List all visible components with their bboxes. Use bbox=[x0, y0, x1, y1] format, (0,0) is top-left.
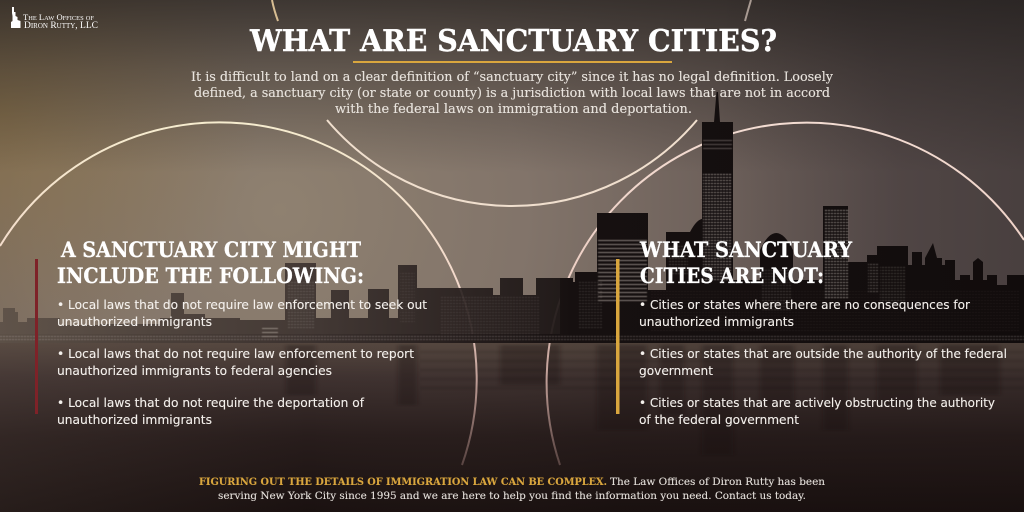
title: WHAT ARE SANCTUARY CITIES? bbox=[249, 24, 777, 59]
footer call to action: The Law Offices of Diron Rutty has been bbox=[610, 476, 825, 488]
bullet list: might include bbox=[57, 297, 427, 427]
decorative arc: right circle bbox=[547, 123, 1024, 465]
decorative arc: left circle bbox=[0, 122, 477, 465]
bullet list: might include: unauthorized immigrants bbox=[57, 412, 212, 427]
accent bar: gold bbox=[616, 259, 620, 414]
bullet list: are not: • Cities or states that are actively obstructing the authority bbox=[639, 395, 996, 410]
skyline lit windows bbox=[0, 140, 1024, 341]
bullet list: might include: • Local laws that do not require law enforcement to report bbox=[57, 346, 414, 361]
skyline silhouette bbox=[0, 92, 1024, 343]
heading: might include: A SANCTUARY CITY MIGHT bbox=[60, 237, 361, 262]
background: water with reflections bbox=[0, 343, 1024, 512]
bullet list: are not: • Cities or states that are outside the authority of the federal bbox=[639, 346, 1007, 361]
accent bar: red bbox=[35, 259, 38, 414]
heading: are not: WHAT SANCTUARY bbox=[639, 237, 853, 262]
panel: what sanctuary cities are not bbox=[616, 237, 1007, 427]
intro paragraph: with the federal laws on immigration and deportation. bbox=[335, 102, 692, 117]
heading: might include: INCLUDE THE FOLLOWING: bbox=[57, 263, 364, 288]
intro paragraph: defined, a sanctuary city (or state or county) is a jurisdiction with local laws that are not in accord bbox=[194, 86, 830, 101]
footer call to action: FIGURING OUT THE DETAILS OF IMMIGRATION LAW CAN BE COMPLEX. bbox=[199, 476, 607, 488]
bullet list: might include: unauthorized immigrants bbox=[57, 314, 212, 329]
icon: statue of liberty bbox=[11, 7, 20, 28]
decorative arc: top circle bbox=[272, 0, 751, 206]
panel: what a sanctuary city might include bbox=[35, 237, 427, 427]
title underline bbox=[353, 61, 672, 63]
bullet list: are not: • Cities or states where there are no consequences for bbox=[639, 297, 971, 312]
heading: are not: CITIES ARE NOT: bbox=[640, 263, 824, 288]
intro paragraph bbox=[191, 70, 834, 117]
bullet list: might include: • Local laws that do not require the deportation of bbox=[57, 395, 365, 410]
heading: might include bbox=[57, 237, 364, 288]
logo: law offices wordmark: Diron Rutty, LLC bbox=[24, 21, 98, 31]
footer call to action bbox=[199, 476, 825, 502]
bullet list: are not: government bbox=[639, 363, 713, 378]
footer call to action: serving New York City since 1995 and we are here to help you find the information you need. Contact us today. bbox=[218, 490, 806, 502]
logo: law offices wordmark bbox=[11, 7, 98, 31]
bullet list: are not bbox=[639, 297, 1007, 427]
bullet list: are not: of the federal government bbox=[639, 412, 799, 427]
intro paragraph: It is difficult to land on a clear definition of “sanctuary city” since it has no legal definition. Loosely bbox=[191, 70, 834, 85]
bullet list: might include: • Local laws that do not require law enforcement to seek out bbox=[57, 297, 427, 312]
heading: are not bbox=[639, 237, 853, 288]
bullet list: are not: unauthorized immigrants bbox=[639, 314, 794, 329]
bullet list: might include: unauthorized immigrants to federal agencies bbox=[57, 363, 332, 378]
background: dusk sky bbox=[0, 0, 1024, 345]
logo: law offices wordmark: The Law Offices of bbox=[23, 13, 95, 22]
